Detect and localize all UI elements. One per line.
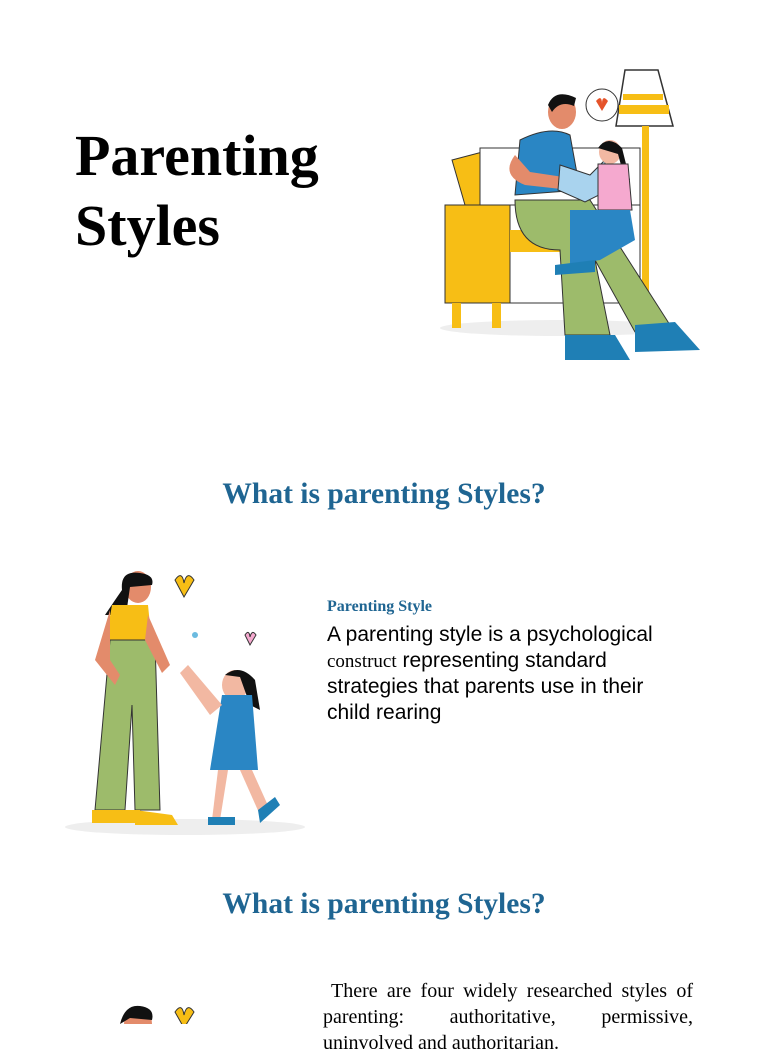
illustration: father reading to daughter: [440, 69, 700, 360]
text block: definition: [327, 598, 653, 724]
illustration: mother and daughter (partial): [120, 1006, 194, 1024]
paragraph: four styles: There are four widely researched styles of parenting: authoritative, permissive, uninvolved and authoritarian.: [323, 980, 693, 1054]
speech bubble: [586, 89, 618, 121]
title: Parenting: [75, 123, 319, 188]
heading 1: What is parenting Styles?: [222, 478, 546, 510]
hearts: [175, 576, 194, 597]
body text: A parenting style is a psychological construct representing standard strategies that parents use in their child rearing: [327, 623, 653, 724]
illustration: mother and daughter: [65, 571, 305, 835]
lamp: [616, 70, 673, 126]
father legs: [515, 200, 670, 335]
heading 2: What is parenting Styles?: [222, 888, 546, 920]
title: [75, 123, 319, 258]
girl: [222, 670, 248, 700]
label: Parenting Style: Parenting Style: [327, 598, 432, 615]
book: [558, 160, 605, 202]
title: Styles: [75, 193, 220, 258]
girl: [599, 140, 621, 164]
father torso: [515, 131, 580, 195]
mother: [125, 571, 151, 603]
armchair: [452, 150, 500, 205]
